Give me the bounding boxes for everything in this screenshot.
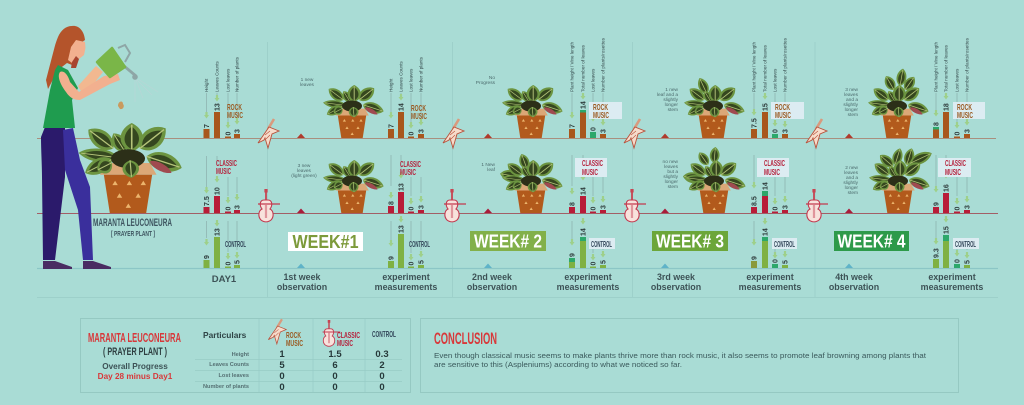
day 1 classic chart: MUSIC <box>216 166 231 176</box>
table subtitle: ( PRAYER PLANT ) <box>103 346 167 358</box>
rock observation note: stem <box>848 112 858 118</box>
rock plant <box>868 68 930 138</box>
icon: violin <box>444 189 466 222</box>
conclusion text: are sensitive to this (Aspleniums) according to what we noticed so far. <box>434 360 682 369</box>
falling leaf <box>118 102 124 109</box>
measurements caption: experiment <box>746 272 794 282</box>
classic chart: 14 <box>580 187 588 195</box>
overall progress: Overall Progress <box>102 362 168 371</box>
classic observation note: (light green) <box>291 173 317 179</box>
classic observation note: longer <box>845 185 858 191</box>
classic observation note: leaves <box>844 170 859 176</box>
rock plant <box>684 76 746 138</box>
week badge: WEEK# 2 <box>474 232 542 252</box>
control chart: CONTROL <box>774 239 795 249</box>
observation marker <box>484 264 492 268</box>
rock chart: 7 <box>388 124 396 128</box>
conclusion text: Even though classical music seems to make plants thrive more than rock music, it also seems to promote leaf browning among plants that <box>434 351 927 360</box>
measurements caption: experiment <box>564 272 612 282</box>
rock column heading: ROCK <box>286 330 302 340</box>
control chart: 0 <box>408 262 416 266</box>
measurements caption: measurements <box>739 282 801 292</box>
rock chart: Plant height / Vine length <box>570 42 574 92</box>
week 3 panel <box>624 37 804 292</box>
rock chart: Total number of leaves <box>580 44 586 92</box>
rock chart <box>933 37 985 138</box>
rock observation note: slightly <box>663 97 679 103</box>
rock chart: ROCK <box>775 102 791 112</box>
icon: rock guitar <box>806 119 827 148</box>
row: lost leaves: 0 <box>379 371 385 382</box>
particulars heading: Particulars <box>203 330 247 340</box>
day 1 label: DAY1 <box>212 274 237 285</box>
row: height: 1.5 <box>328 349 342 360</box>
classic observation note: and a <box>846 175 858 181</box>
day 1 classic chart: 10 <box>214 187 222 195</box>
rock observation note: Progress <box>476 80 496 86</box>
classic chart: 9 <box>934 202 940 206</box>
face <box>68 40 86 63</box>
jeans <box>41 127 93 260</box>
rock chart: 18 <box>944 103 950 111</box>
rock observation note: longer <box>845 107 858 113</box>
rock chart: Lost leaves <box>590 68 596 92</box>
control chart: 9.3 <box>934 248 940 258</box>
day 1 rock chart <box>204 56 243 138</box>
control chart: 9 <box>388 256 396 260</box>
day 1 control chart: 0 <box>226 262 232 266</box>
rock chart: MUSIC <box>411 111 427 121</box>
row: height: 0.3 <box>375 349 389 360</box>
classic observation note: stem <box>848 190 858 196</box>
icon: violin <box>806 189 828 222</box>
observation caption: 3rd week <box>657 272 695 282</box>
row: number of plants: 0 <box>332 382 338 393</box>
row: lost leaves <box>219 371 385 382</box>
rock marker <box>484 134 492 138</box>
classic chart: CLASSIC <box>945 158 966 168</box>
observation caption: observation <box>467 282 517 292</box>
classic observation note: leaf <box>487 167 496 173</box>
rock chart: Leaves Counts <box>398 61 404 92</box>
row: lost leaves: Lost leaves <box>219 373 249 379</box>
rock chart: ROCK <box>593 102 609 112</box>
classic column heading: MUSIC <box>337 338 353 348</box>
classic plant <box>682 147 747 213</box>
day 1 rock chart: Leaves Counts <box>214 61 220 92</box>
row: leaves counts: Leaves Counts <box>209 362 249 368</box>
classic chart: 16 <box>944 184 950 192</box>
classic chart: 13 <box>398 183 406 191</box>
classic marker <box>297 208 305 213</box>
classic plant <box>323 159 385 213</box>
measurements caption: measurements <box>921 282 983 292</box>
classic observation note: stem <box>668 184 678 190</box>
rock chart: 15 <box>762 103 770 111</box>
classic chart: CLASSIC <box>582 158 603 168</box>
classic observation note: longer <box>665 179 678 185</box>
classic chart <box>933 155 972 213</box>
observation caption: observation <box>651 282 701 292</box>
day 1 rock chart: Height <box>204 78 209 92</box>
day 1 rock chart: Lost leaves <box>226 68 230 92</box>
day 1 plant <box>78 120 185 213</box>
icon: violin <box>258 189 280 222</box>
rock chart: Number of plants <box>418 56 424 92</box>
hair <box>46 26 85 89</box>
rock chart: Height <box>388 78 394 92</box>
classic chart: 14 <box>762 182 770 190</box>
rock chart <box>751 37 804 138</box>
classic chart: MUSIC <box>582 167 598 177</box>
rock observation note: leaves <box>844 92 859 98</box>
rock column heading: MUSIC <box>286 338 303 348</box>
rock marker <box>845 134 853 138</box>
classic observation note: 2 new <box>845 165 859 171</box>
rock chart: Lost leaves <box>408 68 414 92</box>
icon: watering can <box>97 45 138 80</box>
measurements caption: measurements <box>375 282 437 292</box>
classic chart: 0 <box>954 206 962 210</box>
row: lost leaves: 0 <box>279 371 285 382</box>
classic observation note: no new <box>663 160 679 165</box>
day 1 control chart: 5 <box>234 260 242 264</box>
rock observation note: longer <box>665 102 678 108</box>
row: height <box>232 349 389 360</box>
rock observation note: 1 new <box>301 77 314 83</box>
rock marker <box>297 134 305 138</box>
rock observation note: No <box>489 75 495 81</box>
rock chart: Total number of leaves <box>762 44 768 92</box>
classic chart: 0 <box>590 206 598 210</box>
rock chart: 3 <box>600 129 608 133</box>
classic chart: 8.5 <box>752 196 758 206</box>
row: leaves counts: 2 <box>379 360 385 371</box>
day 1 rock chart: 3 <box>234 129 242 133</box>
rock chart: Number of plants/rosettes <box>782 37 788 92</box>
classic observation note: 1 New <box>481 162 496 168</box>
rock chart: 8 <box>934 122 940 126</box>
rock observation note: leaves <box>300 82 315 88</box>
rock chart: MUSIC <box>593 110 609 120</box>
rock chart: MUSIC <box>957 110 973 120</box>
rock chart: 0 <box>408 132 416 136</box>
day 1 classic chart: 0 <box>226 206 232 210</box>
plant common name: [ PRAYER PLANT ] <box>111 231 155 238</box>
rock chart: MUSIC <box>775 110 791 120</box>
control chart: 0 <box>772 259 780 263</box>
row: number of plants <box>203 382 385 393</box>
rock chart: 14 <box>398 103 406 111</box>
week badge: WEEK# 4 <box>838 232 906 252</box>
classic chart: 3 <box>418 205 426 209</box>
classic observation note: leaves <box>297 168 312 174</box>
rock chart <box>388 56 427 138</box>
rock chart: 0 <box>590 127 598 131</box>
day 1 control chart: 13 <box>214 228 222 236</box>
observation marker <box>661 264 669 268</box>
conclusion heading: CONCLUSION <box>434 329 497 348</box>
day 1 classic chart: 7.5 <box>204 196 211 206</box>
neck shadow <box>71 56 79 68</box>
rock chart: ROCK <box>957 102 973 112</box>
day 1 classic chart: CLASSIC <box>216 158 237 168</box>
rock chart: Plant height / Vine length <box>752 42 756 92</box>
row: number of plants: 0 <box>279 382 285 393</box>
day 1 classic chart: 3 <box>234 205 242 209</box>
observation caption: observation <box>829 282 879 292</box>
water spray <box>135 79 158 102</box>
rock chart <box>569 37 622 138</box>
classic chart <box>751 155 790 213</box>
day 1 rock chart: ROCK <box>227 102 243 112</box>
control chart <box>933 216 979 268</box>
week 4 panel <box>806 37 985 292</box>
classic plant <box>869 147 934 213</box>
rock chart: Number of plants/rosettes <box>964 37 970 92</box>
classic chart: MUSIC <box>764 167 780 177</box>
rock chart: Lost leaves <box>954 68 960 92</box>
day 1 rock chart: 7 <box>204 124 211 128</box>
row: number of plants: 0 <box>379 382 385 393</box>
classic observation note: leaves <box>664 164 679 170</box>
control chart: 5 <box>782 260 790 264</box>
panel: overall progress table <box>80 318 410 393</box>
icon: rock guitar <box>258 119 279 148</box>
rock observation note: slightly <box>843 102 859 108</box>
observation caption: observation <box>277 282 327 292</box>
week badge: WEEK#1 <box>292 232 358 252</box>
row: leaves counts <box>209 360 385 371</box>
shoes <box>43 261 111 269</box>
measurements caption: experiment <box>382 272 430 282</box>
day 1 rock chart: 13 <box>214 103 222 111</box>
classic column heading: CLASSIC <box>337 330 360 340</box>
classic marker <box>484 208 492 213</box>
classic chart: MUSIC <box>945 167 961 177</box>
row: leaves counts: 6 <box>332 360 338 371</box>
rock plant <box>323 84 385 138</box>
control chart: 14 <box>580 228 588 236</box>
rock observation note: stem <box>668 107 678 113</box>
rock chart: 3 <box>418 129 426 133</box>
control chart: 0 <box>954 259 962 263</box>
icon: rock guitar <box>443 119 464 148</box>
row: height: 1 <box>279 349 285 360</box>
control chart <box>388 216 430 268</box>
rock column heading <box>268 319 303 348</box>
rock chart: 0 <box>772 129 780 133</box>
control chart: 14 <box>762 228 770 236</box>
arms <box>78 66 103 96</box>
rock chart: ROCK <box>411 103 427 113</box>
observation caption: 4th week <box>835 272 873 282</box>
rock marker <box>661 134 669 138</box>
day 1 classic chart <box>204 156 242 213</box>
day 1 control chart: 9 <box>204 255 211 259</box>
green top <box>43 65 78 128</box>
row: lost leaves: 0 <box>332 371 338 382</box>
control chart: 15 <box>944 226 950 234</box>
day 1 rock chart: 0 <box>226 132 232 136</box>
control chart: CONTROL <box>955 239 976 249</box>
classic observation note: slightly <box>663 174 679 180</box>
rock chart: Lost leaves <box>772 68 778 92</box>
illustration: woman watering plant <box>41 26 158 269</box>
rock chart: 7 <box>570 124 576 128</box>
plant name: MARANTA LEUCONEURA <box>93 217 172 229</box>
rock chart: 3 <box>964 129 972 133</box>
row: height: Height <box>232 352 249 358</box>
rock chart: 7.5 <box>752 118 758 128</box>
table title: MARANTA LEUCONEURA <box>88 330 181 345</box>
week 1 panel <box>258 56 437 292</box>
measurements caption: measurements <box>557 282 619 292</box>
rock plant <box>502 84 564 138</box>
classic chart: CLASSIC <box>764 158 785 168</box>
rock observation note: 1 new <box>665 87 679 93</box>
classic marker <box>845 208 853 213</box>
day difference: Day 28 minus Day1 <box>98 372 173 381</box>
text: CONTROL <box>225 239 246 249</box>
rock observation note: 3 new <box>845 87 859 93</box>
classic column heading <box>323 320 360 348</box>
row: number of plants: Number of plants <box>203 384 249 390</box>
control chart <box>751 218 797 268</box>
classic chart: 0 <box>772 206 780 210</box>
rock chart: 3 <box>782 129 790 133</box>
day 1 rock chart: Number of plants <box>234 56 240 92</box>
classic chart: 0 <box>408 206 416 210</box>
week 2 panel <box>443 37 622 292</box>
classic chart: MUSIC <box>400 167 416 177</box>
rock chart: 14 <box>580 101 588 109</box>
rock chart: 0 <box>954 132 962 136</box>
week 1 panel: CONTROL <box>409 239 430 249</box>
classic observation note: 3 new <box>298 163 311 169</box>
classic chart: CLASSIC <box>400 159 421 169</box>
rock chart: Total number of leaves <box>944 44 948 92</box>
observation caption: 2nd week <box>472 272 512 282</box>
control chart: 0 <box>590 262 598 266</box>
classic plant <box>499 152 564 213</box>
classic observation note: slightly <box>843 180 859 186</box>
classic chart: 8 <box>388 201 396 205</box>
observation caption: 1st week <box>283 272 321 282</box>
classic chart: 3 <box>782 205 790 209</box>
rock observation note: and a <box>846 97 858 103</box>
icon: rock guitar <box>624 119 645 148</box>
classic chart <box>569 155 608 213</box>
panel: conclusion <box>420 318 958 392</box>
icon: violin <box>624 189 646 222</box>
control chart: CONTROL <box>591 239 612 249</box>
classic chart: 3 <box>600 205 608 209</box>
rock chart: Number of plants/rosettes <box>600 37 606 92</box>
control column heading: CONTROL <box>372 329 396 339</box>
classic chart: 3 <box>964 205 972 209</box>
classic chart <box>388 155 426 213</box>
rock observation note: leaf and a <box>657 92 678 98</box>
control chart: 9 <box>570 253 576 257</box>
classic marker <box>661 208 669 213</box>
observation marker <box>297 264 305 268</box>
classic observation note: but a <box>667 169 678 175</box>
day 1 rock chart: MUSIC <box>227 110 243 120</box>
control chart: 5 <box>600 260 608 264</box>
control chart: 5 <box>964 260 972 264</box>
week badge: WEEK# 3 <box>656 232 724 252</box>
measurements caption: experiment <box>928 272 976 282</box>
control chart: 13 <box>398 225 406 233</box>
rock chart: Plant height / Vine length <box>934 42 938 92</box>
row: leaves counts: 5 <box>279 360 285 371</box>
control chart: 5 <box>418 260 426 264</box>
observation marker <box>845 264 853 268</box>
classic chart: 8 <box>570 202 576 206</box>
control chart <box>569 218 615 268</box>
day 1 control chart <box>204 220 246 268</box>
control chart: 9 <box>752 256 758 260</box>
